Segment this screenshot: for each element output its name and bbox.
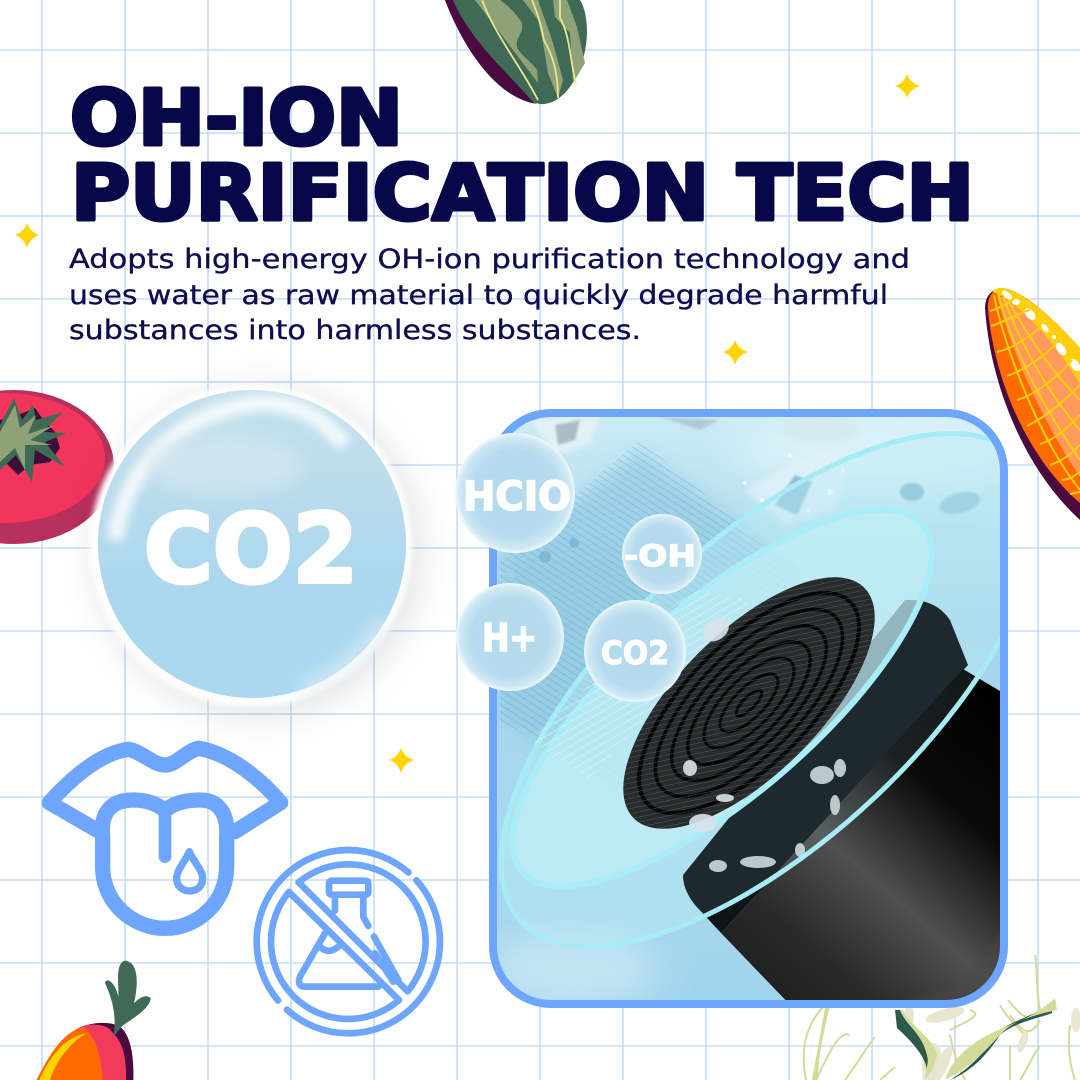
title: [70, 74, 974, 238]
description text: substances into harmless substances.: [69, 315, 641, 346]
bubble: HCIO: [455, 433, 575, 553]
illustration: tomato: [0, 390, 114, 544]
bubble: CO2: CO2: [601, 634, 669, 672]
fine water lines: [500, 442, 764, 743]
product photo panel: [489, 409, 1008, 1008]
title: PURIFICATION TECH: [71, 150, 974, 238]
bubble: H+: H+: [482, 616, 537, 660]
outer water ripple fill: [540, 436, 985, 749]
illustration: corn cob: [985, 288, 1080, 520]
splash droplets: [505, 415, 983, 579]
black filter disc: [623, 577, 875, 829]
description text: uses water as raw material to quickly degrade harmful: [69, 280, 888, 311]
droplets on device head: [709, 759, 846, 872]
bubble: H+: [456, 583, 564, 691]
outer ripple edge: [498, 431, 1000, 949]
big bubble label: CO2: [144, 495, 358, 605]
illustration: carrot: [37, 961, 151, 1080]
bubble: -OH: [622, 514, 702, 594]
black device cylinder: [721, 669, 1010, 1010]
sparkle stars: [15, 74, 920, 773]
description text: Adopts high-energy OH-ion purification technology and: [69, 244, 910, 275]
light ripple rays: [530, 590, 750, 780]
inner water ripple: [510, 506, 934, 890]
icon: no chemicals flask: [219, 812, 478, 1071]
tomato calyx: [0, 398, 67, 482]
big CO2 bubble: [90, 385, 418, 712]
bubble: HCIO: HCIO: [463, 474, 571, 520]
device head: [683, 600, 968, 933]
icon: lips and tongue: [49, 748, 281, 928]
illustration: striped cucumber: [445, 0, 587, 104]
bubble: -OH: -OH: [624, 539, 696, 573]
illustration: white flower leaves: [804, 955, 1080, 1080]
panel border: [493, 413, 1004, 1004]
droplets on disc: [683, 614, 734, 832]
water background: [489, 409, 1008, 1008]
description text: [69, 244, 910, 346]
bubble: CO2: [584, 600, 686, 702]
title: OH-ION: [70, 74, 403, 164]
